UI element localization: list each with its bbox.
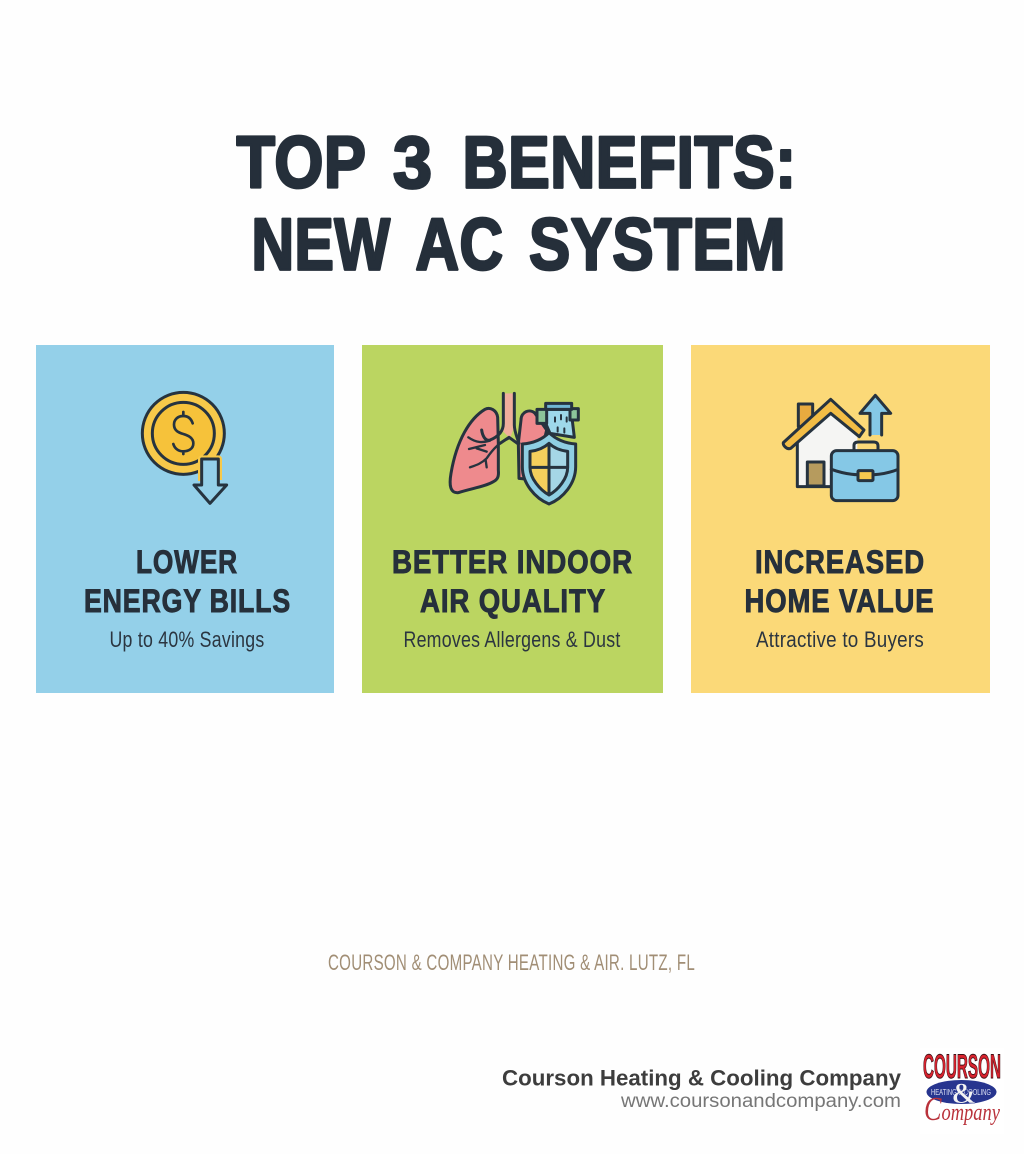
logo: & (952, 1077, 976, 1110)
title: BENEFITS: (462, 122, 796, 204)
heading: INCREASED (755, 544, 925, 580)
title: 3 (393, 122, 432, 204)
icon: house, briefcase and up arrow (783, 395, 898, 501)
logo: HEATING & COOLING (931, 1088, 991, 1097)
heading: BETTER INDOOR (392, 544, 633, 580)
icon: lungs and shield (450, 393, 578, 504)
company website: www.coursonandcompany.com (620, 1091, 901, 1112)
subtext: Up to 40% Savings (110, 627, 264, 652)
panel: lower energy bills (36, 345, 334, 693)
title: SYSTEM (529, 204, 786, 286)
title: AC (416, 204, 504, 286)
heading: LOWER (136, 544, 238, 580)
subtext: Removes Allergens & Dust (404, 627, 620, 652)
panel: better indoor air quality: AIR QUALITY (420, 583, 606, 619)
panel: lower energy bills: ENERGY BILLS (84, 583, 291, 619)
logo (920, 1048, 1004, 1134)
title: TOP (236, 122, 366, 204)
subtext: Attractive to Buyers (756, 627, 924, 652)
title: NEW (252, 204, 390, 286)
panel: better indoor air quality (362, 345, 663, 693)
panel: increased home value (691, 345, 990, 693)
company name: Courson Heating & Cooling Company (502, 1066, 902, 1090)
title (236, 122, 796, 286)
logo: Company (924, 1091, 1000, 1128)
location caption: COURSON & COMPANY HEATING & AIR. LUTZ, FL (328, 950, 695, 975)
icon: coin with down arrow (142, 392, 233, 508)
panel: increased home value: HOME VALUE (744, 583, 934, 619)
